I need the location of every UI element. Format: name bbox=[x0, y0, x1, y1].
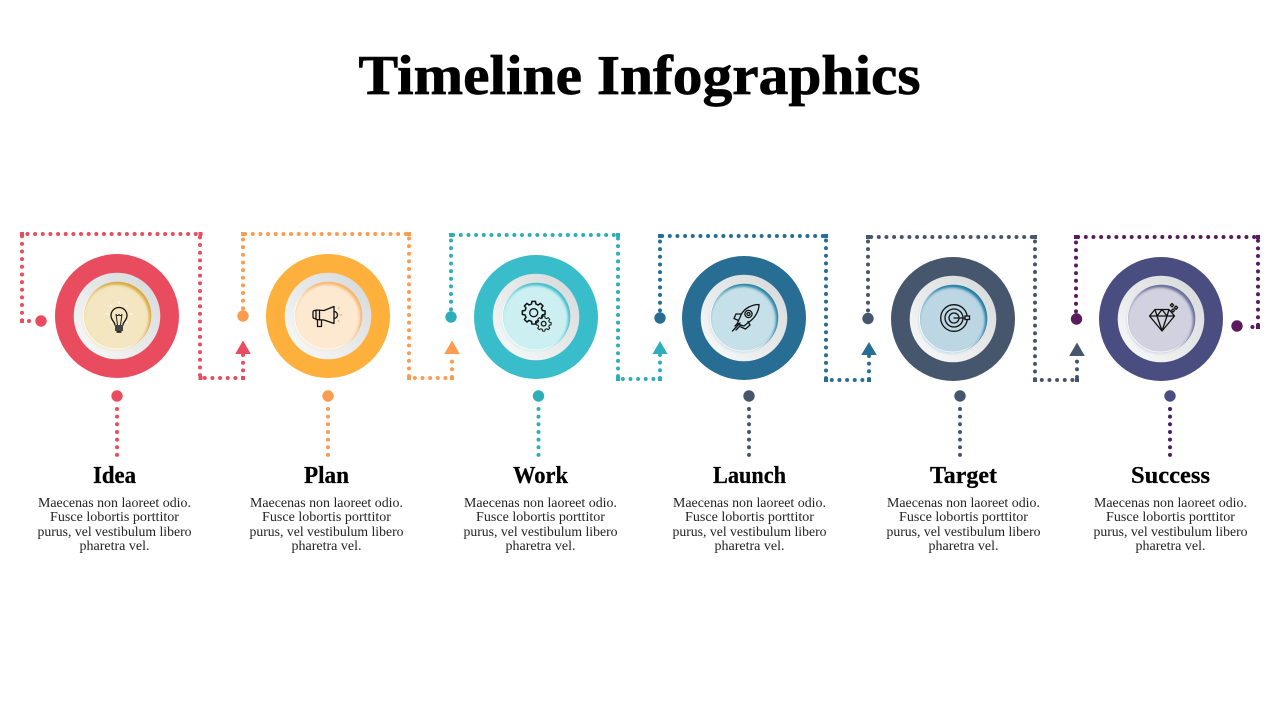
icon: gears bbox=[522, 301, 551, 331]
title: Timeline Infographics bbox=[358, 45, 920, 107]
dotted connector: Success bbox=[1071, 235, 1260, 332]
step 4: Launch medallion bbox=[682, 256, 806, 380]
text block: Launch: Launch bbox=[713, 463, 786, 489]
dotted connector: Launch bbox=[654, 234, 877, 382]
text block: Success: pharetra vel. bbox=[1136, 539, 1206, 554]
connector dot and stem: Idea bbox=[111, 390, 123, 459]
text block: Launch: pharetra vel. bbox=[714, 539, 784, 554]
text block: Work: Work bbox=[513, 463, 569, 489]
text block: Idea: Fusce lobortis porttitor bbox=[50, 510, 179, 525]
text block: Target: pharetra vel. bbox=[928, 539, 998, 554]
text block: Target: Target bbox=[930, 463, 997, 489]
icon: rocket bbox=[732, 304, 759, 331]
text block: Target bbox=[886, 463, 1040, 554]
text block: Launch: Maecenas non laoreet odio. bbox=[673, 496, 826, 511]
text block: Work: pharetra vel. bbox=[506, 539, 576, 554]
step 2: Plan medallion bbox=[266, 254, 390, 378]
text block: Success bbox=[1094, 463, 1248, 554]
text block: Work: Maecenas non laoreet odio. bbox=[464, 496, 617, 511]
text block: Success: Fusce lobortis porttitor bbox=[1106, 510, 1235, 525]
icon: target bbox=[941, 305, 970, 331]
connector dot and stem: Work bbox=[533, 390, 544, 459]
text block: Success: purus, vel vestibulum libero bbox=[1094, 525, 1248, 540]
connector dot and stem: Launch bbox=[743, 390, 755, 459]
text block: Work: purus, vel vestibulum libero bbox=[464, 525, 618, 540]
text block: Success: Success bbox=[1131, 463, 1210, 489]
connector dot and stem: Target bbox=[954, 390, 966, 459]
text block: Idea: Maecenas non laoreet odio. bbox=[38, 496, 191, 511]
text block: Plan: purus, vel vestibulum libero bbox=[250, 525, 404, 540]
text block: Launch bbox=[672, 463, 826, 554]
text block: Idea: purus, vel vestibulum libero bbox=[38, 525, 192, 540]
text block: Idea: Idea bbox=[93, 463, 136, 489]
text block: Success: Maecenas non laoreet odio. bbox=[1094, 496, 1247, 511]
icon: light bulb bbox=[106, 301, 132, 333]
icon: diamond bbox=[1150, 304, 1178, 331]
dotted connector: Work bbox=[445, 233, 668, 381]
step 5: Target medallion bbox=[891, 257, 1015, 381]
text block: Plan: Plan bbox=[304, 463, 349, 489]
text block: Target: Maecenas non laoreet odio. bbox=[887, 496, 1040, 511]
text block: Target: purus, vel vestibulum libero bbox=[886, 525, 1040, 540]
text block: Plan bbox=[250, 463, 404, 554]
text block: Target: Fusce lobortis porttitor bbox=[899, 510, 1028, 525]
text block: Plan: Maecenas non laoreet odio. bbox=[250, 496, 403, 511]
text block: Launch: Fusce lobortis porttitor bbox=[685, 510, 814, 525]
dotted connector: Target bbox=[862, 235, 1085, 382]
step 1: Idea medallion bbox=[55, 254, 179, 378]
step 3: Work medallion bbox=[474, 255, 598, 379]
icon: megaphone bbox=[313, 306, 342, 326]
connector dot and stem: Plan bbox=[322, 390, 334, 459]
text block: Plan: pharetra vel. bbox=[292, 539, 362, 554]
step 6: Success medallion bbox=[1099, 257, 1223, 381]
dotted connector: Idea bbox=[20, 232, 251, 380]
text block: Work bbox=[464, 463, 618, 554]
text block: Idea bbox=[38, 463, 192, 554]
dotted connector: Plan bbox=[237, 232, 460, 380]
text block: Launch: purus, vel vestibulum libero bbox=[672, 525, 826, 540]
text block: Idea: pharetra vel. bbox=[80, 539, 150, 554]
connector dot and stem: Success bbox=[1164, 390, 1176, 459]
text block: Work: Fusce lobortis porttitor bbox=[476, 510, 605, 525]
text block: Plan: Fusce lobortis porttitor bbox=[262, 510, 391, 525]
